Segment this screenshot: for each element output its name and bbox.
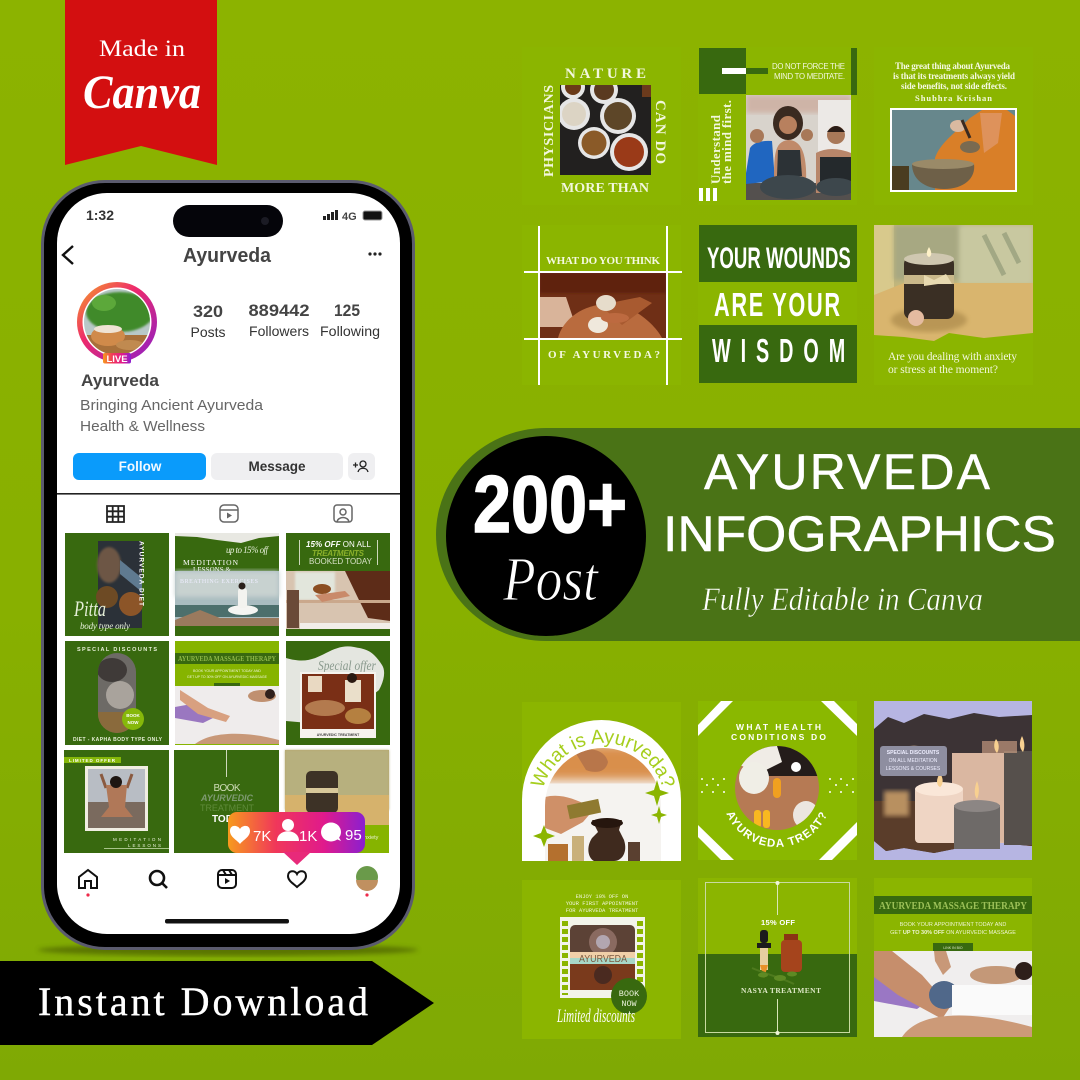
feed post pitta diet: Pitta (73, 596, 106, 621)
feed post pitta diet: AYURVEDA DIET (137, 541, 144, 606)
tile limited discounts (522, 880, 681, 1039)
feed post special discounts: BOOK (126, 713, 141, 718)
tile health conditions (698, 701, 857, 860)
mandala film card (560, 917, 645, 998)
tile candle anxiety: or stress at the moment? (888, 364, 998, 376)
tile quote shubhra krishan: side benefits, not side effects. (901, 81, 1007, 91)
profile header (63, 245, 382, 267)
feed post discount treatments: 15% OFF ON ALL (306, 540, 372, 549)
profile stats: Followers (249, 323, 309, 339)
massage photo (874, 951, 1032, 1037)
tile massage therapy (874, 878, 1033, 1037)
feed post candle: anxiety (361, 835, 379, 841)
tile meditate: Understand (708, 114, 723, 184)
tile massage therapy: GET UP TO 30% OFF ON AYURVEDIC MASSAGE (890, 930, 1016, 936)
tile nasya treatment: NASYA TREATMENT (741, 986, 821, 995)
profile header: Ayurveda (183, 245, 272, 267)
profile stats: 320 (193, 302, 223, 321)
nav reels icon (218, 870, 236, 888)
profile stats: Posts (190, 324, 226, 340)
feed post book treatment: BOOK (214, 783, 241, 794)
ribbon text made in: Made in (99, 36, 186, 61)
red made in canva ribbon (65, 0, 217, 165)
tile candles lavender: ON ALL MEDITATION (889, 758, 938, 764)
profile bio: Bringing Ancient Ayurveda (80, 397, 264, 414)
bottom navigation (79, 866, 378, 924)
feed post special discounts: NOW (128, 720, 139, 725)
feed post special discounts (65, 641, 169, 745)
bottom post previews (522, 701, 1032, 1039)
profile buttons: Message (248, 459, 306, 474)
black post count circle: 200+ (473, 460, 627, 550)
tile your wounds: ARE YOUR (714, 286, 840, 323)
title band (436, 428, 1080, 641)
tile nature physicians: PHYSICIANS (542, 85, 557, 177)
spice bowls photo (560, 85, 651, 175)
feed post limited offer: MEDITATION (113, 837, 161, 842)
feed post special offer (286, 641, 390, 745)
nav heart icon (288, 871, 306, 887)
tile nasya treatment (698, 878, 857, 1037)
tile limited discounts: ENJOY 10% OFF ON (576, 893, 628, 900)
tile limited discounts: YOUR FIRST APPOINTMENT (566, 900, 639, 907)
oil pouring photo (540, 745, 665, 861)
tile quote shubhra krishan: The great thing about Ayurveda (895, 61, 1010, 71)
nav profile avatar (356, 866, 378, 897)
singing bowl photo (890, 108, 1017, 192)
tile nature physicians: NATURE (565, 66, 646, 82)
phone shadow (38, 944, 418, 956)
book now badge: BOOK (619, 989, 640, 999)
tile meditate: MIND TO MEDITATE. (774, 72, 845, 81)
tile meditate: the mind first. (719, 100, 734, 184)
feed post discount treatments: TREATMENTS (312, 549, 365, 558)
feed post book treatment: TODAY (212, 814, 246, 825)
phone body (41, 180, 415, 950)
tile massage therapy: AYURVEDA MASSAGE THERAPY (879, 900, 1027, 912)
herbal compress massage photo (735, 746, 819, 830)
top post previews (522, 47, 1033, 385)
tile what do you think: WHAT DO YOU THINK (546, 255, 660, 267)
oil massage photo (540, 273, 666, 338)
heart metric: 7K (253, 828, 271, 845)
feed post pitta diet (65, 533, 169, 636)
feed post meditation (175, 533, 279, 636)
profile tabs (107, 505, 352, 522)
tile quote shubhra krishan: is that its treatments always yield (893, 71, 1015, 81)
status bar (86, 205, 382, 237)
instant download banner (0, 961, 434, 1045)
feed post special offer: AYURVEDIC TREATMENT (317, 733, 360, 737)
tile nature physicians: MORE THAN (561, 181, 649, 196)
tile candle anxiety: Are you dealing with anxiety (888, 351, 1017, 363)
tile what is ayurveda (522, 720, 681, 861)
tile limited discounts: FOR AYURVEDA TREATMENT (566, 907, 639, 914)
tile meditate: DO NOT FORCE THE (772, 62, 845, 71)
candle photo (874, 225, 1033, 341)
feed post special discounts: SPECIAL DISCOUNTS (77, 647, 157, 653)
tile quote shubhra krishan (874, 47, 1033, 205)
book now badge: NOW (621, 999, 638, 1009)
heading ayurveda: AYURVEDA (704, 444, 991, 500)
feed post special offer: Special offer (318, 659, 376, 674)
feed post book treatment: AYURVEDIC (200, 793, 254, 803)
profile stats (190, 301, 380, 340)
black post count circle: Post (502, 546, 600, 614)
tile what do you think (522, 225, 682, 385)
tile what do you think: OF AYURVEDA? (548, 349, 660, 361)
feed post meditation: LESSONS & (193, 566, 232, 574)
tile meditate (698, 47, 857, 205)
tile nature physicians: CAN DO (652, 100, 668, 164)
book now badge (611, 978, 647, 1014)
feed post limited offer: LESSONS (128, 843, 161, 848)
tile health conditions: CONDITIONS DO (731, 732, 826, 742)
tile candles lavender (874, 701, 1032, 860)
nav home icon (79, 870, 97, 888)
instant download banner: Instant Download (38, 979, 368, 1024)
tile your wounds: YOUR WOUNDS (707, 242, 851, 275)
profile bio: Ayurveda (81, 371, 160, 390)
profile stats: 889442 (248, 301, 310, 320)
profile stats: 125 (334, 301, 360, 320)
subtitle: Fully Editable in Canva (701, 582, 983, 618)
feed post massage therapy: GET UP TO 30% OFF ON AYURVEDIC MASSAGE (187, 675, 268, 679)
feed post special discounts: DIET - KAPHA BODY TYPE ONLY (73, 737, 163, 743)
feed post pitta diet: body type only (80, 621, 130, 631)
profile stats: Following (320, 323, 380, 339)
profile buttons (73, 453, 375, 480)
feed post massage therapy (175, 641, 279, 745)
feed post book treatment: TREATMENT (200, 803, 254, 813)
tile limited discounts: Limited discounts (556, 1006, 635, 1027)
tile nature physicians (522, 47, 681, 205)
tile quote shubhra krishan: Shubhra Krishan (915, 93, 992, 103)
feed post meditation: MEDITATION (183, 558, 239, 567)
feed grid (64, 533, 390, 853)
tile massage therapy: BOOK YOUR APPOINTMENT TODAY AND (900, 922, 1006, 928)
tile health conditions: WHAT HEALTH (736, 722, 821, 732)
tile candle anxiety (874, 225, 1033, 385)
heading infographics: INFOGRAPHICS (663, 506, 1056, 562)
feed post discount treatments: BOOKED TODAY (309, 557, 373, 566)
feed post meditation: up to 15% off (226, 545, 269, 555)
mandala film card: AYURVEDA (579, 953, 627, 965)
profile bio (80, 371, 264, 435)
profile bio: Health & Wellness (80, 418, 205, 435)
feed post limited offer (64, 750, 169, 853)
notification bubble (228, 812, 365, 865)
comment metric: 95 (345, 827, 362, 844)
tile your wounds (698, 225, 857, 383)
yoga class photo (746, 95, 851, 200)
tile candles lavender: SPECIAL DISCOUNTS (887, 750, 940, 756)
feed post book treatment (174, 750, 279, 853)
ribbon text canva: Canva (83, 66, 201, 119)
feed post discount treatments (286, 533, 390, 636)
status bar: 1:32 (86, 207, 114, 223)
tile massage therapy: LINK IN BIO (943, 946, 963, 950)
avatar with live ring (77, 282, 157, 365)
feed post meditation: BREATHING EXERCISES (180, 579, 258, 585)
black post count circle (446, 436, 646, 636)
follower metric: 1K (299, 828, 317, 845)
curved text ayurveda treat: AYURVEDA TREAT? (726, 812, 826, 848)
tile candles lavender: LESSONS & COURSES (886, 766, 941, 772)
status bar: 4G (342, 211, 357, 223)
curved heading what is ayurveda: What is Ayurveda? (530, 730, 675, 786)
feed post massage therapy: AYURVEDA MASSAGE THERAPY (178, 655, 276, 663)
live badge: LIVE (106, 354, 128, 365)
feed post massage therapy: BOOK YOUR APPOINTMENT TODAY AND (193, 669, 261, 673)
nav search icon (150, 871, 167, 888)
phone mockup (41, 180, 415, 950)
tile nasya treatment: 15% OFF (761, 918, 795, 927)
candles photo (874, 713, 1032, 853)
profile buttons: Follow (119, 459, 162, 474)
feed post limited offer: LIMITED OFFER (69, 758, 116, 763)
oil bottles illustration (752, 930, 802, 984)
tile your wounds: WISDOM (712, 332, 845, 369)
feed post candle (285, 750, 389, 853)
